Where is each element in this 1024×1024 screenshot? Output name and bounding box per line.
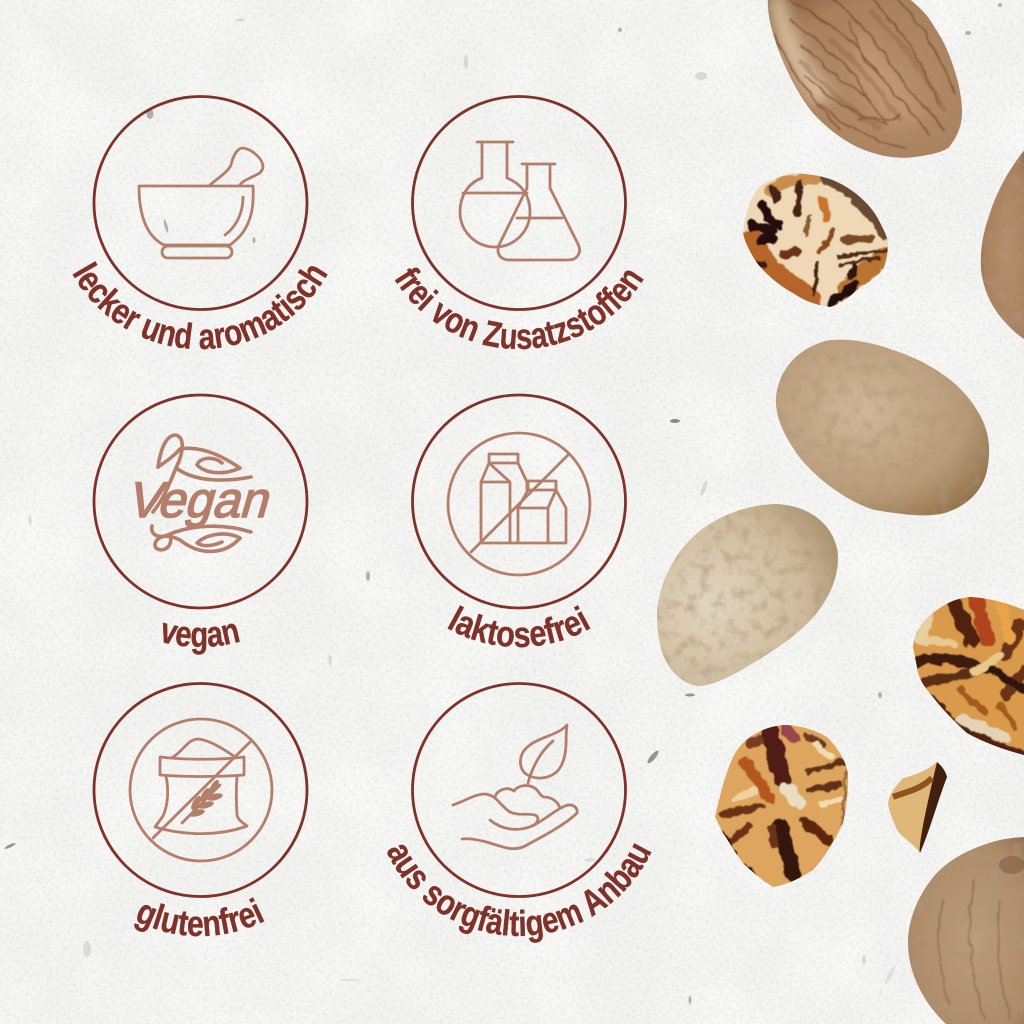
icon: crossed out milk cartons xyxy=(448,433,590,575)
nutmeg slice: lower xyxy=(715,725,848,887)
icon: vegan lettering with leaves xyxy=(123,435,279,551)
nutmeg fragment xyxy=(888,762,947,853)
badge: vegan xyxy=(92,394,308,692)
nutmeg slice: right xyxy=(913,597,1024,755)
label: vegan xyxy=(162,622,240,655)
badge: glutenfrei xyxy=(92,682,308,936)
label: laktosefrei xyxy=(448,605,590,648)
nutmeg: whole top xyxy=(768,0,962,158)
badge ring xyxy=(412,395,626,608)
nutmeg: whole right edge xyxy=(981,148,1024,340)
badge ring xyxy=(412,96,626,310)
icon: laboratory flasks xyxy=(460,142,580,260)
label: aus sorgfältigem Anbau xyxy=(387,843,652,943)
label: lecker und aromatisch xyxy=(72,261,328,350)
label: glutenfrei xyxy=(134,897,264,936)
badge ring xyxy=(412,684,626,896)
badge: aus sorgfaeltigem Anbau xyxy=(387,682,652,943)
label: frei von Zusatzstoffen xyxy=(394,268,644,350)
badge: laktosefrei xyxy=(411,394,627,648)
badge ring xyxy=(94,684,307,896)
badge ring xyxy=(94,395,307,608)
nutmeg: whole pale xyxy=(657,504,838,686)
nutmeg slice: upper xyxy=(743,173,888,307)
badge: frei von Zusatzstoffen xyxy=(394,95,644,350)
badge: lecker und aromatisch xyxy=(72,95,328,350)
icon: mortar and pestle xyxy=(139,148,263,258)
nutmeg: whole centre xyxy=(776,340,989,515)
nutmeg: whole bottom right xyxy=(908,837,1024,1024)
icon: crossed out flour sack xyxy=(130,719,272,861)
icon: vegan lettering with leaves: Vegan xyxy=(123,472,279,528)
icon: hand holding seedling xyxy=(453,725,577,849)
badge ring xyxy=(94,96,307,310)
